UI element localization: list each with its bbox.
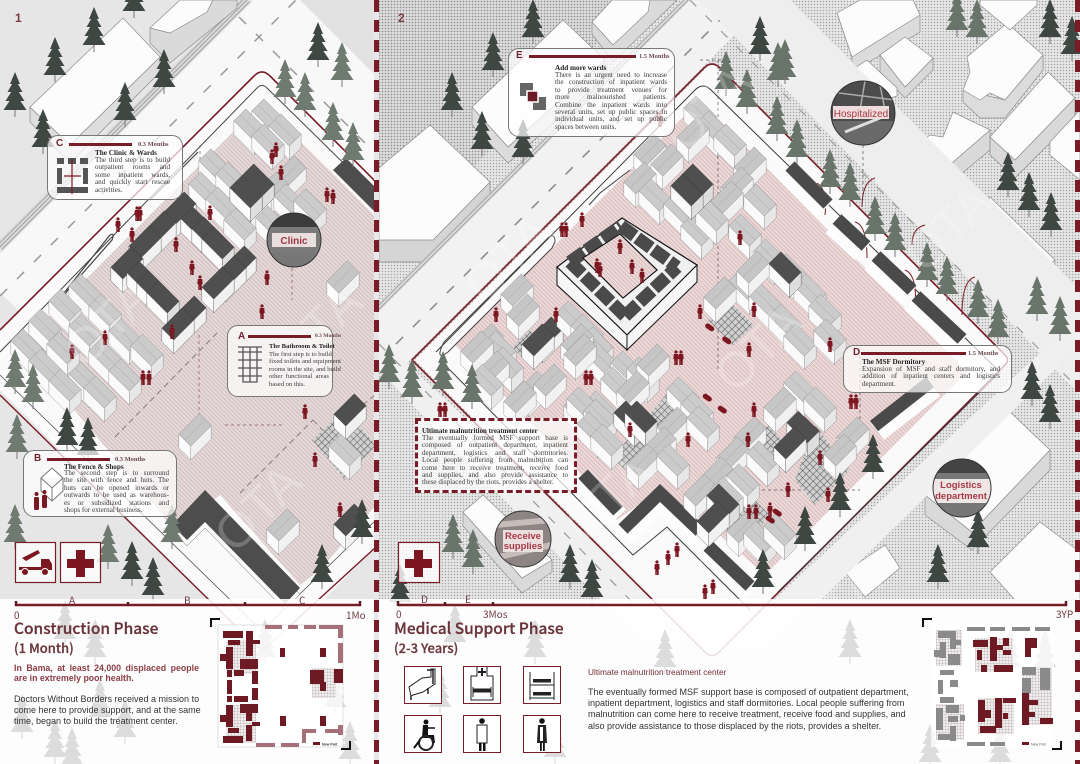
card E: Add more wards: more malnourished patients. xyxy=(555,93,667,101)
card D: The MSF Dormitory: Expansion of MSF and staff dormitory, and xyxy=(862,365,1000,373)
timeline labels: construction xyxy=(14,592,366,622)
lead text: Bama: are in extremely poor health. xyxy=(14,672,134,682)
timeline labels: construction: A xyxy=(69,592,75,607)
watermark: OTA xyxy=(73,613,183,723)
timeline labels: medical: 3YP xyxy=(1056,606,1073,621)
card E: Add more wards: spaces between units. xyxy=(555,123,616,131)
callout photo: Hospitalized xyxy=(831,81,895,145)
callout photo: Logistics department: Logistics xyxy=(940,480,982,491)
icon: bed xyxy=(404,666,442,704)
minimap: construction phase plan xyxy=(211,619,350,749)
icon: bunk beds xyxy=(524,666,560,704)
ground band inside the road, medical xyxy=(415,62,1006,599)
heading: Construction Phase: Construction Phase xyxy=(14,617,158,639)
site boundary lines xyxy=(0,72,376,648)
card E: Add more wards: E xyxy=(516,50,523,61)
timeline labels: medical: 0 xyxy=(396,606,402,621)
card A: The Bathroom and Toilet: The Bathroom & Toilet xyxy=(269,343,335,350)
card C: The Clinic and Wards: 0.3 Months xyxy=(138,141,169,148)
timeline labels: construction: 1Mo xyxy=(346,607,366,622)
paved checker patches xyxy=(512,300,850,540)
dark hut rows along the edges xyxy=(583,166,962,592)
card A: The Bathroom and Toilet: based on this. xyxy=(269,381,305,388)
minimap: construction phase plan: New Part xyxy=(322,742,338,746)
card A: The Bathroom and Toilet: 0.3 Months xyxy=(315,333,341,339)
trees, construction xyxy=(4,0,374,602)
card D: The MSF Dormitory: department. xyxy=(862,380,896,388)
callout photo: Receive supplies xyxy=(495,511,551,567)
hut clusters, construction xyxy=(11,99,366,555)
card E: Add more wards: individual units, and set up public xyxy=(555,115,667,123)
panel divider xyxy=(376,0,1078,764)
callout photo: Logistics department: department xyxy=(935,491,988,502)
card: Ultimate malnutrition treatment center: these displaced by the riots, provides a shelter. xyxy=(422,478,554,486)
watermark: OTA xyxy=(38,33,148,143)
body text: MSF support base xyxy=(588,687,909,731)
body text: Doctors Without Borders: come here to provide support, and at the same xyxy=(14,705,201,715)
card D: The MSF Dormitory: The MSF Dormitory xyxy=(862,358,925,366)
card A: The Bathroom and Toilet: A xyxy=(238,331,245,342)
lead text: Bama xyxy=(14,663,199,683)
card A: The Bathroom and Toilet: fixed toilets and equipment xyxy=(269,358,341,365)
heading: Medical Support Phase: Medical Support Phase xyxy=(394,617,564,639)
card B: The Fence and Shops: The Fence & Shops xyxy=(64,463,124,471)
callout photo: Hospitalized: Hospitalized xyxy=(834,109,888,120)
card C: The Clinic and Wards: activities. xyxy=(95,186,122,194)
ground band inside the road, construction xyxy=(0,63,374,599)
timeline labels: construction: B xyxy=(184,592,191,607)
body text: Doctors Without Borders: Doctors Without Borders received a mission to xyxy=(14,694,199,704)
minimap: medical support phase plan xyxy=(923,619,1061,749)
watermark: OTA xyxy=(893,173,1003,283)
dark chevron huts, construction xyxy=(172,158,376,610)
subheading: 1 Month: (1 Month) xyxy=(14,638,74,657)
icon: hospital bed xyxy=(464,666,500,704)
watermark: OTA xyxy=(553,443,663,553)
subheading: Ultimate malnutrition treatment center: Ultimate malnutrition treatment center xyxy=(588,667,726,677)
card E: Add more wards: the construction of inpatient wards xyxy=(555,78,667,86)
watermark: OTA xyxy=(653,53,763,163)
card C: The Clinic and Wards: and quickly start rescue xyxy=(95,178,170,186)
card D: The MSF Dormitory: D xyxy=(853,347,860,358)
card B: The Fence and Shops: B xyxy=(34,453,41,464)
body text: Doctors Without Borders: time, began to build the treatment center. xyxy=(14,716,178,726)
timeline labels: medical: D xyxy=(421,591,428,606)
timeline labels: construction: 0 xyxy=(14,607,20,622)
card E: Add more wards: several units, set up public spaces in xyxy=(555,108,667,116)
icon: hut and people xyxy=(34,468,64,510)
card C: The Clinic and Wards: The third step is to build xyxy=(95,156,170,164)
card B: The Fence and Shops: 0.3 Months xyxy=(115,456,146,463)
callout photo: Receive supplies: supplies xyxy=(504,541,542,552)
lead text: Bama: In Bama, at least 24,000 displaced people xyxy=(14,663,199,673)
watermark: OTA xyxy=(263,273,373,383)
card A: The Bathroom and Toilet: rooms in the site, and build xyxy=(269,366,341,373)
card B: The Fence and Shops xyxy=(23,450,177,517)
callout photo: Logistics department xyxy=(933,459,991,517)
card E: Add more wards: There is an urgent need to increase xyxy=(555,71,667,79)
watermark: OTA xyxy=(453,203,563,313)
callout photo: Clinic: Clinic xyxy=(280,236,308,247)
watermark: OTA xyxy=(53,268,163,378)
site ground: construction xyxy=(20,103,376,585)
body text: Doctors Without Borders xyxy=(14,694,201,726)
body text: MSF support base: also provide assistance to those displaced by the riots, provides a shelter. xyxy=(588,721,881,731)
card B: The Fence and Shops: es or subsidized stations and xyxy=(64,499,169,507)
icon: clinic plan xyxy=(57,158,88,194)
panel number 1: 1 xyxy=(15,11,22,25)
icon: wheelchair patient xyxy=(404,716,442,752)
card E: Add more wards: Combine the inpatient wards into xyxy=(555,101,667,109)
card: Ultimate malnutrition treatment center: department, logistics and staff dormitories. xyxy=(422,449,568,457)
card A: The Bathroom and Toilet: other functional areas xyxy=(269,373,329,380)
timeline: medical xyxy=(398,601,1067,606)
watermark: OTA xyxy=(703,293,813,403)
card: Ultimate malnutrition treatment center: Ultimate malnutrition treatment center xyxy=(422,428,538,435)
site boundary lines xyxy=(412,60,1008,656)
body text: MSF support base: The eventually formed MSF support base is composed of outpatient department, xyxy=(588,687,909,697)
subheading: 2-3 Years: (2-3 Years) xyxy=(394,638,458,657)
card D: The MSF Dormitory: 1.5 Months xyxy=(968,350,999,357)
panel: construction phase site xyxy=(0,0,380,657)
card B: The Fence and Shops: the site with fence and huts. The xyxy=(64,476,169,484)
trees, medical xyxy=(378,0,1080,609)
card E: Add more wards: 1.5 Months xyxy=(639,53,670,60)
card B: The Fence and Shops: huts can be opened inwards or xyxy=(64,484,169,492)
panel number 2: 2 xyxy=(398,11,405,25)
timeline: construction xyxy=(15,601,361,606)
card: Ultimate malnutrition treatment center xyxy=(415,418,577,493)
timeline labels: medical xyxy=(396,591,1073,621)
icon: red cross, medical xyxy=(398,542,440,582)
card: Ultimate malnutrition treatment center: Local people suffering from malnutrition can xyxy=(422,456,568,464)
hut clusters, medical xyxy=(461,96,869,567)
card E: Add more wards: to provide treatment venues for xyxy=(555,86,667,94)
icon: linked squares xyxy=(520,83,546,110)
timeline labels: construction: C xyxy=(299,592,305,607)
timeline labels: medical: E xyxy=(465,591,471,606)
icon: bathroom plan xyxy=(238,346,262,383)
callout photo: Clinic xyxy=(267,213,321,267)
card B: The Fence and Shops: The second step is to surround xyxy=(64,469,169,477)
icon: red cross, construction xyxy=(60,542,100,582)
watermark: OTA xyxy=(203,453,313,563)
people, medical xyxy=(437,112,859,599)
timeline labels: medical: 3Mos xyxy=(483,606,507,621)
card D: The MSF Dormitory: addition of inpatient centers and logistics xyxy=(862,372,1000,380)
card: Ultimate malnutrition treatment center: composed of outpatient department, inpatient xyxy=(422,441,568,449)
white city blocks, medical xyxy=(379,0,1080,600)
card: Ultimate malnutrition treatment center: come here to receive treatment, receive food xyxy=(422,464,568,472)
card B: The Fence and Shops: outwards to be used as warehous- xyxy=(64,491,169,499)
body text: MSF support base: inpatient department, logistics and staff dormitories. Local people suffering from xyxy=(588,698,904,708)
card C: The Clinic and Wards: some inpatient wards, xyxy=(95,171,170,179)
card E: Add more wards xyxy=(508,48,675,137)
card C: The Clinic and Wards: The Clinic & Wards xyxy=(95,149,157,157)
card: Ultimate malnutrition treatment center: and supplies, and also provide assistance to xyxy=(422,471,568,479)
watermark: OTA xyxy=(783,553,893,663)
background buildings, construction xyxy=(30,0,237,163)
icon: truck xyxy=(16,542,56,582)
body text: MSF support base: malnutrition can come here to receive treatment, receive food and supplies, and xyxy=(588,709,906,719)
card A: The Bathroom and Toilet xyxy=(227,325,333,397)
card C: The Clinic and Wards: C xyxy=(56,138,63,149)
bottom information band background xyxy=(0,599,1080,764)
card B: The Fence and Shops: shops for external business. xyxy=(64,506,142,514)
card C: The Clinic and Wards xyxy=(47,135,183,200)
icon: nurse xyxy=(524,716,560,752)
card C: The Clinic and Wards: outpatient rooms and xyxy=(95,163,170,171)
courtyard ward block xyxy=(557,218,697,350)
site ground: medical xyxy=(455,100,967,575)
panel: medical support phase site xyxy=(378,0,1080,657)
card D: The MSF Dormitory xyxy=(843,345,1012,393)
card E: Add more wards: Add more wards xyxy=(555,64,606,72)
people, construction xyxy=(69,142,343,517)
icon: doctor xyxy=(464,716,500,752)
minimap: medical support phase plan: New Part xyxy=(1031,742,1046,746)
callout photo: Receive supplies: Receive xyxy=(505,531,541,542)
card: Ultimate malnutrition treatment center: The eventually formed MSF support base is xyxy=(422,434,568,442)
card A: The Bathroom and Toilet: The first step is to build xyxy=(269,351,332,358)
